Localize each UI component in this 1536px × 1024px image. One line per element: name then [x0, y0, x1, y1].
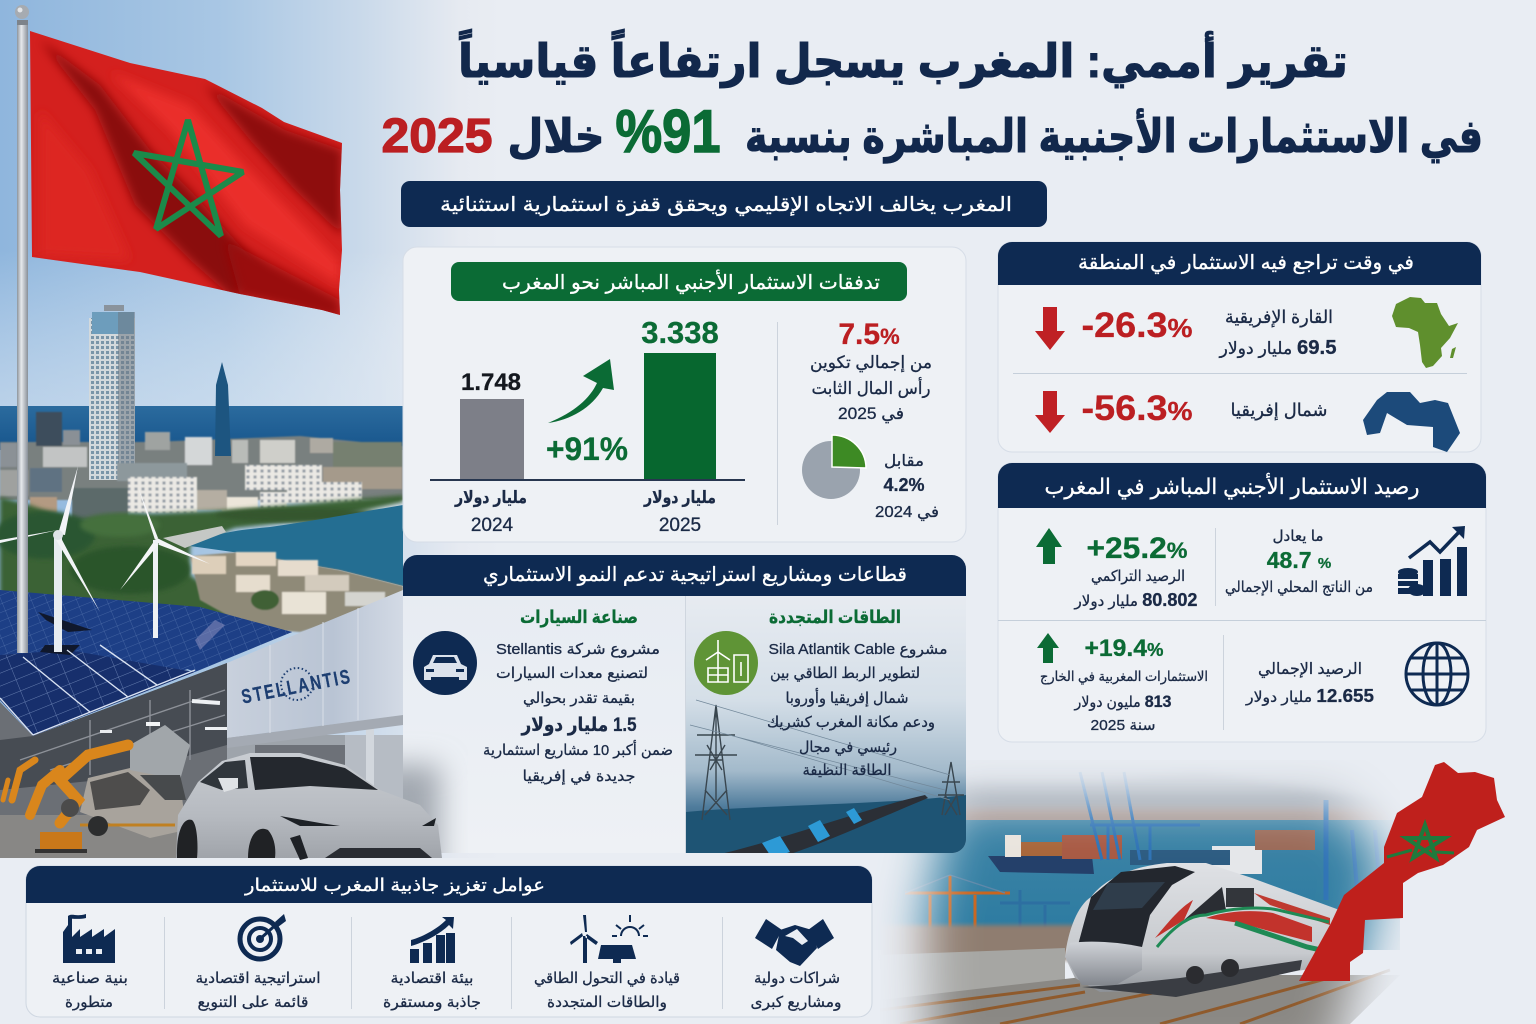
panel: regional decline — [998, 242, 1481, 452]
heading: FDI flows — [451, 262, 907, 301]
heading: factors — [26, 866, 872, 903]
city and coast scene — [0, 305, 403, 860]
bar chart — [430, 315, 745, 536]
heading: regional decline: في وقت تراجع فيه الاستثمار في المنطقة — [1078, 252, 1414, 275]
second ship and containers — [1062, 830, 1315, 874]
2025: 2025 — [382, 110, 492, 163]
icon: Africa map — [1392, 297, 1458, 368]
pie chart — [802, 435, 866, 499]
plus 91 percent: +91% — [546, 431, 628, 467]
factor: international partnerships: ومشاريع كبرى — [750, 994, 842, 1011]
comparison to 2024: 4.2% — [883, 475, 925, 495]
port cranes foreground — [905, 874, 1070, 928]
stat: cumulative stock — [1036, 528, 1198, 610]
column: renewable energy — [694, 607, 948, 779]
heading: regional decline — [998, 242, 1481, 285]
column: automotive industry: ضمن أكبر 10 مشاريع استثمارية — [483, 740, 673, 759]
share of fixed capital formation: رأس المال الثابت — [812, 377, 930, 398]
title — [382, 29, 1483, 165]
blue gantry cranes — [1080, 772, 1380, 900]
seaside houses — [190, 552, 403, 632]
stat: cumulative stock: +25.2% — [1086, 532, 1188, 565]
stat: cumulative stock: الرصيد التراكمي — [1091, 568, 1185, 586]
stat: total stock: الرصيد الإجمالي — [1258, 661, 1362, 679]
factor: energy transition: قيادة في التحول الطاقي — [534, 970, 680, 988]
North Africa label: شمال إفريقيا — [1230, 400, 1328, 421]
heading: factors: عوامل تغزيز جاذبية المغرب للاستثمار — [244, 875, 545, 896]
bar chart: مليار دولار — [643, 488, 716, 508]
share of fixed capital formation: في 2025 — [838, 404, 904, 424]
stat: share of GDP: من الناتج المحلي الإجمالي — [1225, 579, 1373, 597]
heading: FDI flows: تدفقات الاستثمار الأجنبي المباشر نحو المغرب — [502, 270, 880, 295]
white wind turbines — [0, 466, 210, 652]
minus 26.3 percent: -26.3% — [1082, 306, 1192, 345]
bay — [190, 505, 403, 586]
icon: chart and coins — [1398, 526, 1467, 596]
stat: Moroccan investment abroad: 813 مليون دولار — [1074, 692, 1172, 711]
stat: share of GDP: ما يعادل — [1272, 528, 1324, 545]
icon: growth bars — [410, 917, 455, 963]
comparison to 2024 — [875, 453, 939, 522]
port and train scene — [860, 760, 1505, 1024]
share of fixed capital formation: 7.5% — [838, 318, 900, 351]
column: automotive industry: صناعة السيارات — [520, 607, 638, 627]
icon: target — [240, 914, 286, 959]
tower — [89, 305, 135, 480]
Africa label: القارة الإفريقية — [1225, 307, 1333, 328]
factor: diversified strategy: قائمة على التنويع — [198, 994, 308, 1011]
icon: wind and solar — [694, 631, 758, 695]
bar chart: 1.748 — [461, 369, 521, 396]
icon: factory — [63, 914, 115, 963]
factor: industrial infrastructure: متطورة — [65, 994, 113, 1011]
column: renewable energy: مشروع Sila Atlantik Cable — [768, 641, 948, 658]
stat: cumulative stock: 80.802 مليار دولار — [1073, 590, 1198, 610]
bar chart: 3.338 — [641, 315, 719, 350]
stat: share of GDP — [1225, 528, 1373, 597]
map of Morocco with star — [1299, 762, 1505, 981]
bar chart: 2024 — [471, 515, 514, 536]
share of fixed capital formation: من إجمالي تكوين — [810, 353, 932, 373]
icon: handshake — [755, 919, 834, 966]
column: renewable energy: رئيسي في مجال — [799, 739, 897, 757]
heading: sectors — [403, 555, 966, 596]
column: renewable energy: ودعم مكانة المغرب كشريك — [767, 714, 935, 731]
factor: attractive economy: جاذبة ومستقرة — [383, 994, 481, 1011]
factor: attractive economy — [383, 917, 481, 1011]
column: automotive industry: مشروع شركة Stellantis — [496, 641, 660, 658]
heading: sectors: قطاعات ومشاريع استراتيجية تدعم النمو الاستثماري — [483, 564, 907, 587]
title line 2 — [382, 98, 1483, 165]
photo collage: Moroccan flag, city, energy and automotive — [0, 0, 442, 858]
flagpole — [15, 5, 29, 653]
stat: Moroccan investment abroad: الاستثمارات المغربية في الخارج — [1040, 669, 1208, 685]
green star — [134, 120, 243, 236]
column: renewable energy: لتطوير الربط الطاقي بين — [770, 665, 920, 683]
column: automotive industry: جديدة في إفريقيا — [522, 768, 636, 786]
stat: Moroccan investment abroad: +19.4% — [1084, 635, 1164, 662]
icon: car — [413, 631, 477, 695]
stellantis logo text: STELLANTIS — [240, 666, 354, 709]
column: automotive industry: لتصنيع معدات السيارات — [496, 665, 648, 682]
stellantis building — [227, 590, 403, 748]
factor: industrial infrastructure: بنية صناعية — [52, 970, 128, 987]
icon: green up arrow — [1036, 528, 1062, 564]
row: Africa — [1035, 297, 1458, 368]
icon: globe — [1406, 643, 1468, 705]
column: automotive industry: بقيمة تقدر بحوالي — [523, 690, 635, 708]
solar panels — [0, 590, 292, 736]
bar chart: مليار دولار — [454, 488, 527, 508]
panel: FDI stock in Morocco — [998, 463, 1486, 742]
column: automotive industry — [413, 607, 673, 786]
factor: diversified strategy: استراتيجية اقتصادية — [196, 970, 320, 987]
energy photo: pylons and submarine cable — [686, 635, 966, 853]
panel: FDI flows — [403, 247, 966, 542]
car body shells on the line — [80, 725, 190, 838]
high-speed train — [1065, 863, 1345, 997]
icon: wind turbine and solar panel — [570, 915, 648, 963]
sky — [0, 0, 500, 858]
column: renewable energy: الطاقة النظيفة — [802, 762, 892, 779]
subtitle banner: المغرب يخالف الاتجاه الإقليمي ويحقق قفزة استثمارية استثنائية — [440, 194, 1012, 217]
subtitle banner — [401, 181, 1047, 227]
bar chart: 2025 — [659, 515, 701, 536]
comparison to 2024: في 2024 — [875, 504, 939, 522]
factor: diversified strategy — [196, 914, 320, 1011]
factor: international partnerships — [750, 919, 842, 1011]
factor: attractive economy: بيئة اقتصادية — [390, 970, 474, 987]
mohammed VI tower — [215, 362, 231, 456]
growth arrow — [548, 359, 614, 423]
row: North Africa — [1035, 389, 1460, 452]
title line 2: خلال — [508, 110, 604, 162]
icon: red down arrow — [1035, 391, 1065, 433]
minus 56.3 percent: -56.3% — [1082, 389, 1192, 428]
Africa label — [1218, 307, 1336, 359]
panel: sectors and strategic projects — [403, 555, 966, 860]
icon: green up arrow — [1037, 633, 1059, 663]
91 percent: ‏%91 — [616, 98, 720, 165]
stat: total stock: 12.655 مليار دولار — [1245, 686, 1374, 706]
pale hall behind car — [227, 729, 403, 798]
factor: industrial infrastructure — [52, 914, 128, 1011]
orange robot arms — [3, 745, 128, 823]
share of fixed capital formation — [810, 318, 932, 424]
column: renewable energy: شمال إفريقيا وأوروبا — [786, 688, 908, 707]
comparison to 2024: مقابل — [884, 453, 924, 470]
stat: Moroccan investment abroad — [1037, 633, 1208, 734]
factor: energy transition: والطاقات المتجددة — [547, 994, 667, 1011]
panel: attractiveness factors — [26, 866, 872, 1017]
title line 1: تقرير أممي: المغرب يسجل ارتفاعاً قياسياً — [458, 29, 1348, 88]
factor: international partnerships: شراكات دولية — [754, 970, 840, 987]
factory interior — [0, 663, 240, 860]
factor: energy transition — [534, 915, 680, 1011]
icon: North Africa map — [1363, 392, 1460, 452]
heading: FDI stock — [998, 463, 1486, 508]
icon: red down arrow — [1035, 307, 1065, 350]
heading: FDI stock: رصيد الاستثمار الأجنبي المباشر في المغرب — [1044, 473, 1420, 500]
silver car — [176, 753, 442, 860]
column: automotive industry: 1.5 مليار دولار — [521, 715, 637, 736]
tree covered coast — [0, 495, 403, 625]
stat: total stock — [1245, 661, 1374, 706]
stat: share of GDP: 48.7 % — [1267, 547, 1331, 573]
container ship — [988, 835, 1094, 874]
stat: Moroccan investment abroad: سنة 2025 — [1090, 717, 1156, 734]
flag of Morocco — [30, 31, 342, 320]
Africa label: 69.5 مليار دولار — [1218, 337, 1336, 359]
factory hall fading into the panel — [403, 748, 456, 853]
column: renewable energy: الطاقات المتجددة — [769, 607, 901, 627]
